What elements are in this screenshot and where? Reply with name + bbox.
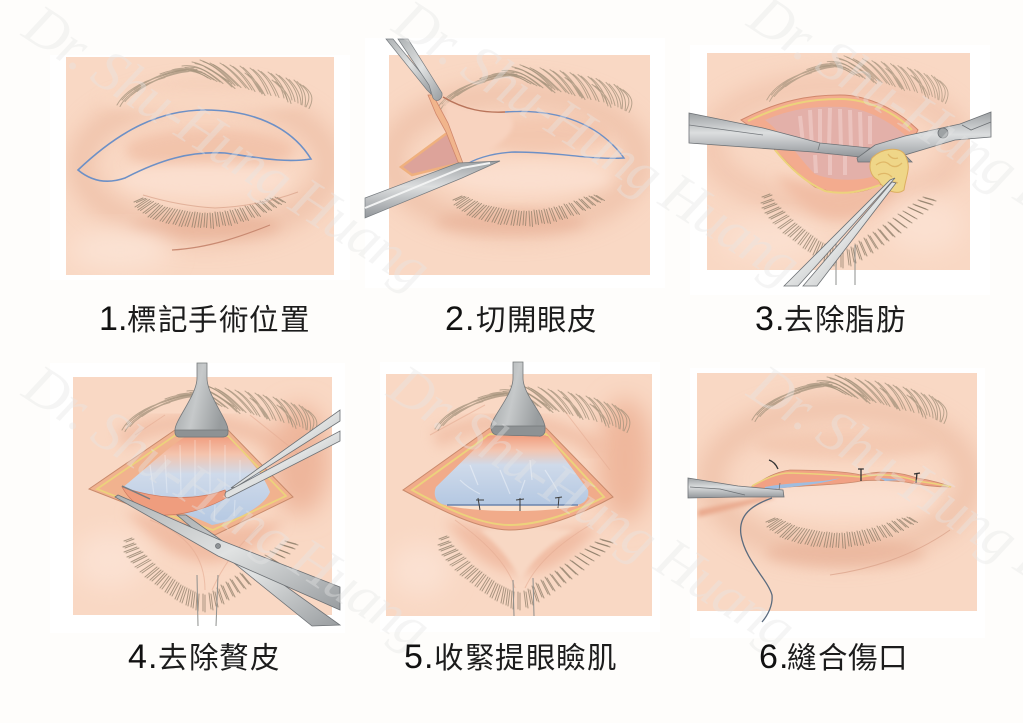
eyelashes	[761, 194, 936, 268]
eyelashes	[438, 536, 613, 610]
raised skin flap	[443, 99, 513, 166]
label 3: 3.	[755, 300, 784, 338]
scissors right	[857, 112, 991, 162]
label 4: 4.	[128, 638, 157, 676]
panel 1: mark surgical site	[66, 57, 334, 275]
muscle sutures	[476, 497, 562, 511]
label 1: 標記手術位置	[127, 304, 310, 337]
eyebrow	[767, 56, 948, 103]
eyebrow	[435, 384, 630, 432]
blue incision outline	[78, 110, 311, 181]
eyelashes	[766, 517, 918, 548]
fat	[870, 149, 908, 192]
forceps	[784, 178, 896, 286]
watermark: top row	[12, 0, 1023, 302]
lid creases	[143, 192, 298, 250]
panel 2: cut eyelid skin	[365, 39, 650, 275]
label 6: 6.	[759, 638, 788, 676]
eyebrow	[122, 385, 317, 434]
watermark: bottom row: Dr. Shu-Hung Huang	[12, 351, 442, 662]
retractor	[491, 362, 545, 436]
surgical opening	[89, 430, 293, 535]
surgical opening	[741, 95, 918, 193]
label 1: 1.	[99, 300, 127, 338]
forceps	[225, 410, 340, 498]
watermark: bottom row: Dr. Shu-Hung Huang	[377, 351, 807, 662]
watermark: top row: Dr. Shu-Hung Huang	[12, 0, 442, 302]
knots	[769, 460, 920, 483]
label 5: 收緊提眼瞼肌	[434, 642, 617, 675]
label 2: 切開眼皮	[476, 304, 597, 337]
needle holder	[688, 478, 784, 498]
panel 6: suture wound	[688, 373, 977, 622]
retractor	[175, 363, 228, 437]
eyelashes	[123, 538, 298, 612]
panel 4: remove excess skin	[73, 363, 340, 626]
eyelashes	[453, 195, 604, 226]
eyelashes	[134, 197, 286, 228]
forceps	[386, 39, 442, 100]
label 3: 去除脂肪	[784, 304, 906, 337]
eyebrow	[752, 375, 947, 424]
blue and cut lines	[443, 97, 624, 166]
suture thread	[741, 498, 772, 622]
label 2: 2.	[445, 300, 474, 338]
scalpel	[365, 161, 500, 218]
watermark: bottom row	[12, 351, 1023, 662]
eyebrow	[117, 60, 312, 108]
eyebrow	[437, 65, 632, 112]
surgical opening	[403, 428, 613, 530]
flap edge	[428, 95, 464, 166]
sutures	[513, 578, 534, 616]
sutures	[836, 240, 855, 285]
label 4: 去除贅皮	[158, 642, 280, 675]
panel 3: remove fat	[689, 53, 991, 286]
sutures	[197, 575, 218, 626]
scissors	[115, 486, 340, 626]
label 5: 5.	[404, 638, 433, 676]
excised skin strip	[122, 487, 228, 515]
exposed tissue	[401, 133, 461, 175]
panel 5: tighten levator muscle	[386, 362, 653, 616]
label 6: 縫合傷口	[787, 642, 908, 675]
suture incision	[750, 470, 951, 490]
clamp left	[689, 113, 870, 157]
